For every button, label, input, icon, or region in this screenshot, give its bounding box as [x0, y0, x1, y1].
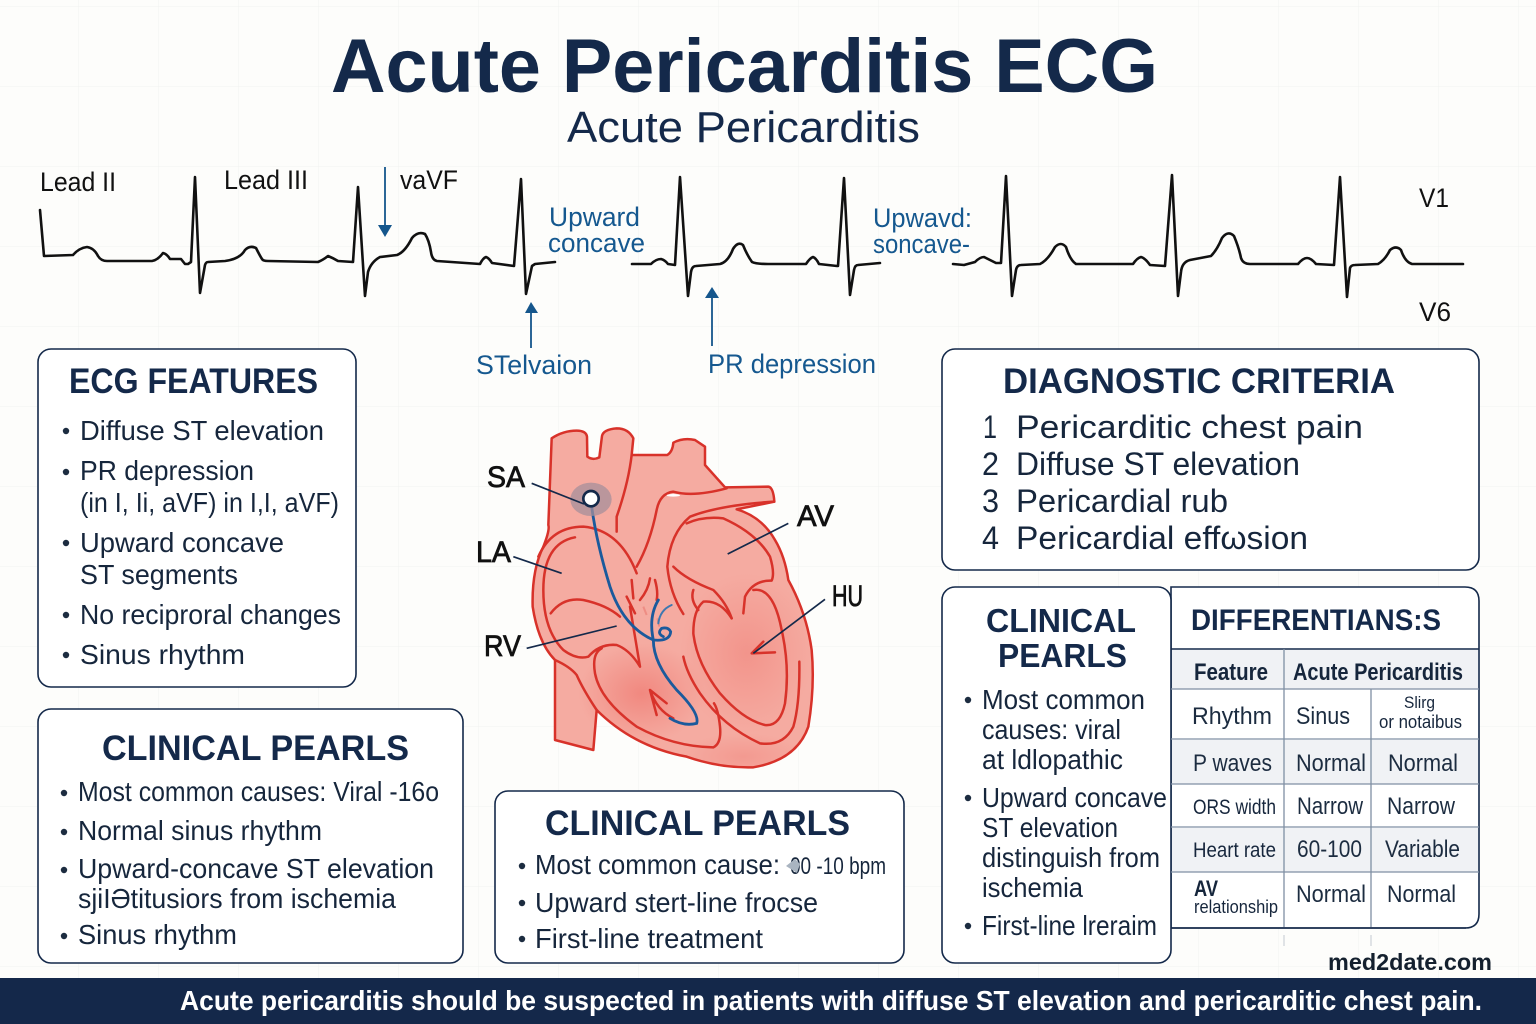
- panel: clinical pearls center: [495, 791, 904, 963]
- callout: upward concave 1: concave: [548, 228, 645, 258]
- heading: ECG features: ECG FEATURES: [69, 362, 318, 401]
- label: RV: RV: [484, 630, 521, 663]
- panel: clinical pearls left: [38, 709, 463, 963]
- table: differential: Narrow: [1297, 793, 1364, 820]
- illustration: heart anatomy: [513, 428, 825, 780]
- label: SA: SA: [487, 461, 525, 494]
- list: clinical pearls right: Upward concave: [982, 782, 1167, 813]
- arrow: up from PR depression: [705, 287, 719, 346]
- list: clinical pearls right: Most common: [982, 684, 1145, 715]
- heading: clinical pearls right: [986, 602, 1136, 674]
- list: clinical pearls right: causes: viral: [982, 714, 1121, 745]
- table: differential: [1171, 649, 1479, 946]
- list: clinical pearls center: 00 -10 bpm: [790, 853, 886, 880]
- table: differential: Normal: [1296, 881, 1366, 908]
- list: criteria: Pericardial effωsion: [1016, 520, 1308, 556]
- table: differential: Variable: [1385, 836, 1460, 863]
- label: ST elevation: STelvaion: [476, 350, 592, 380]
- table: differential: Heart rate: [1193, 839, 1276, 862]
- list: clinical pearls center: Most common cause:: [535, 849, 780, 880]
- table: differential: Acute Pericarditis: [1293, 659, 1463, 686]
- ECG strip: [40, 165, 1463, 380]
- panel: ECG features: [38, 349, 356, 687]
- list: criteria: Pericarditic chest pain: [1016, 409, 1363, 445]
- arrow: up from ST elevation: [525, 302, 538, 348]
- footer banner: Acute pericarditis should be suspected in patients with diffuse ST elevation and pericarditic chest pain.: [180, 985, 1482, 1016]
- list: criteria: Diffuse ST elevation: [1016, 446, 1300, 482]
- list: criteria: 4: [982, 520, 999, 556]
- subtitle: Acute Pericarditis: [567, 103, 920, 152]
- table: differential: AV: [1194, 876, 1218, 901]
- heart diagram: [476, 428, 863, 780]
- label: LA: LA: [476, 536, 511, 569]
- list: ECG features: Upward concave: [80, 527, 284, 558]
- label: V1: V1: [1419, 183, 1449, 213]
- panel: diagnostic criteria: [942, 349, 1479, 570]
- ECG trace: second segment: [632, 177, 880, 296]
- list: ECG features: Diffuse ST elevation: [80, 415, 324, 446]
- list: ECG features: [63, 415, 341, 670]
- callout: upward concave 2: Upwavd:: [873, 203, 972, 233]
- list: criteria: 3: [982, 483, 999, 519]
- list: clinical pearls left: sjiIƏtitusiors from ischemia: [78, 883, 396, 914]
- label: Lead II: Lead II: [40, 167, 116, 197]
- table: differential: or notaibus: [1379, 712, 1462, 732]
- table: differential: Normal: [1296, 750, 1366, 777]
- table: differential: Slirg: [1404, 693, 1435, 712]
- table: differential: Rhythm: [1192, 703, 1272, 730]
- heading: clinical pearls right: PEARLS: [998, 637, 1127, 674]
- list: clinical pearls right: distinguish from: [982, 842, 1160, 873]
- heading: clinical pearls: CLINICAL PEARLS: [102, 729, 409, 768]
- ECG trace: first segment: [40, 177, 555, 296]
- list: ECG features: PR depression: [80, 455, 254, 486]
- list: ECG features: Sinus rhythm: [80, 639, 245, 670]
- list: clinical pearls right: ST elevation: [982, 812, 1118, 843]
- label: HU: HU: [832, 580, 863, 613]
- list: clinical pearls right: [965, 684, 1167, 941]
- table: differential: 60-100: [1297, 836, 1362, 863]
- list: clinical pearls left: Most common causes: Viral -16o: [78, 776, 439, 807]
- list: ECG features: No reciproral changes: [80, 599, 341, 630]
- heading: diagnostic criteria: DIAGNOSTIC CRITERIA: [1003, 362, 1395, 401]
- heading: clinical pearls right: CLINICAL: [986, 602, 1136, 639]
- panel outline: clinical pearls right: [942, 587, 1171, 963]
- heading: differential: DIFFERENTIANS:S: [1191, 604, 1441, 637]
- list: clinical pearls left: Sinus rhythm: [78, 919, 237, 950]
- list: ECG features: ST segments: [80, 559, 238, 590]
- callout: upward concave 1: [548, 202, 645, 258]
- label: vaVF: vaVF: [400, 165, 458, 195]
- label: PR depression: PR depression: [708, 349, 876, 379]
- list: clinical pearls right: ischemia: [982, 872, 1083, 903]
- list: clinical pearls left: Upward-concave ST elevation: [78, 853, 434, 884]
- list: clinical pearls center: First-line treatment: [535, 923, 763, 954]
- table: differential: Feature: [1194, 659, 1268, 686]
- footer banner: [0, 978, 1536, 1024]
- watermark: med2date.com: [1328, 949, 1492, 975]
- list: clinical pearls center: [519, 849, 886, 954]
- callout: upward concave 2: [873, 203, 972, 259]
- table: differential: Normal: [1388, 750, 1458, 777]
- label: V6: V6: [1419, 297, 1451, 327]
- list: criteria: Pericardial rub: [1016, 483, 1228, 519]
- table: differential: ORS width: [1193, 796, 1276, 819]
- label: Lead III: Lead III: [224, 165, 308, 195]
- list: criteria: 2: [982, 446, 999, 482]
- table: differential: Sinus: [1296, 703, 1350, 730]
- list: clinical pearls left: Normal sinus rhythm: [78, 815, 322, 846]
- title: Acute Pericarditis ECG: [331, 24, 1158, 109]
- label: AV: AV: [797, 500, 834, 533]
- heading: clinical pearls center: CLINICAL PEARLS: [545, 804, 850, 843]
- table: differential: relationship: [1194, 897, 1278, 917]
- callout: upward concave 2: soncave-: [873, 229, 970, 259]
- list: ECG features: (in I, Ii, aVF) in I,I, aVF): [80, 487, 339, 518]
- table: differential: P waves: [1193, 750, 1272, 777]
- ECG trace: third segment: [953, 175, 1463, 297]
- list: clinical pearls right: at ldlopathic: [982, 744, 1123, 775]
- panel outline: differential: [1171, 587, 1479, 928]
- list: clinical pearls left: [61, 776, 439, 950]
- list: criteria: 1: [983, 409, 997, 445]
- panel: clinical pearls right and differential: [942, 587, 1479, 963]
- callout: upward concave 1: Upward: [549, 202, 640, 232]
- table: differential: Normal: [1387, 881, 1456, 908]
- table: differential: Narrow: [1387, 793, 1456, 820]
- arrow: down to ST segment: [378, 167, 392, 237]
- list: clinical pearls right: First-line lreraim: [982, 910, 1157, 941]
- list: criteria: [982, 409, 1363, 556]
- list: clinical pearls center: Upward stert-line frocse: [535, 887, 818, 918]
